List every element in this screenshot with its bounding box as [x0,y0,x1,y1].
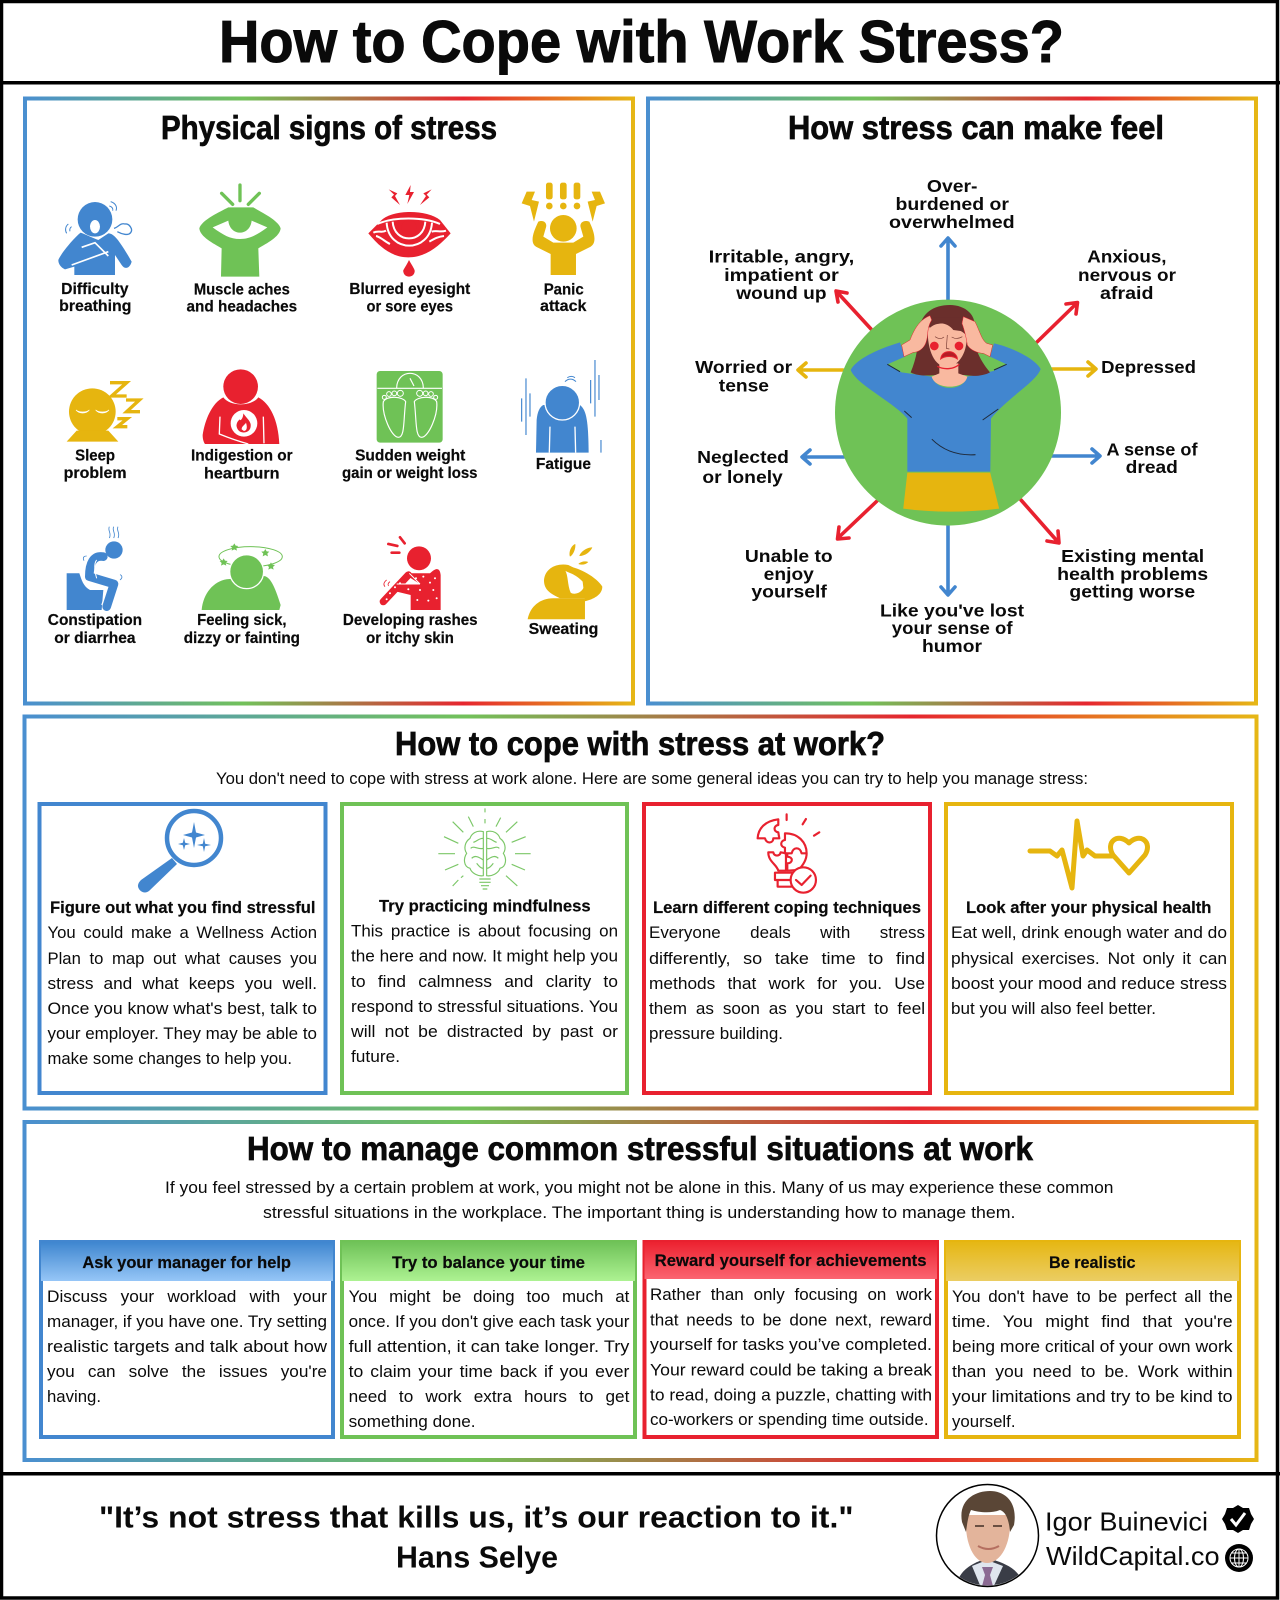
feeling labels: overwhelmed [889,212,1015,232]
icon: sweating [528,544,602,619]
heading and text: methods that work for you. Use [649,975,925,993]
body text: than you need to be. Work within [952,1363,1233,1381]
label: weight: Sudden weight [355,448,465,464]
icon: dizzy [202,543,282,610]
icon: brain light bulb [438,808,531,889]
panel: how to cope with stress at work [24,716,1256,1108]
icon: weight scale [377,371,443,443]
feeling labels: afraid [1100,283,1154,303]
heading and text: boost your mood and reduce stress [951,975,1227,993]
feeling labels: impatient or [724,265,839,285]
feeling labels: nervous or [1078,265,1176,285]
heading and text: make some changes to help you. [48,1050,292,1068]
heading: physical signs: Physical signs of stress [161,109,497,146]
heading and text: to find calmness and clarity to [351,973,618,991]
body text: co-workers or spending time outside. [650,1411,929,1429]
header label: Reward yourself for achievements [655,1252,926,1270]
feeling labels: Worried or [695,357,792,377]
feeling labels: dread [1126,457,1178,477]
card: be realistic [946,1242,1239,1437]
label: sweating: Sweating [529,621,598,638]
heading: how stress can make feel: How stress can make feel [788,109,1164,146]
feeling labels: your sense of [892,618,1013,638]
card: learn different coping techniques [644,804,930,1093]
label: indigestion [191,448,293,482]
label: muscle aches [186,282,297,316]
body text: Discuss your workload with your [47,1288,328,1306]
header label: Ask your manager for help [82,1254,291,1272]
feeling labels: Anxious, [1087,246,1166,266]
body text: to claim your time back if you ever [349,1363,630,1381]
card: try practicing mindfulness [342,804,627,1093]
label: difficulty breathing: Difficulty [61,281,129,298]
body text [952,1288,1233,1431]
card: reward yourself [644,1242,937,1437]
feeling labels: Depressed [1101,357,1196,377]
label: muscle aches: Muscle aches [194,282,290,298]
label: constipation [48,612,142,647]
label: sleep problem [64,448,127,482]
author portrait [936,1484,1038,1590]
intro text: You don't need to cope with stress at work alone. Here are some general ideas you can try to help you manage stress: [216,770,1088,788]
heading and text: respond to stressful situations. You [351,998,618,1016]
heading and text: your employer. They may be able to [48,1025,317,1043]
panel: how to manage common stressful situations [24,1122,1256,1460]
label: blurred eyesight: Blurred eyesight [349,281,470,298]
author name: Igor Buinevici [1045,1507,1208,1537]
heading and text: will not be distracted by past or [350,1023,619,1041]
footer quote: "It’s not stress that kills us, it’s our reaction to it." [99,1500,853,1535]
feeling labels: Neglected [697,447,789,467]
feeling labels [695,176,1208,656]
heading and text: Try practicing mindfulness [379,898,591,916]
feeling labels: Unable to [745,546,833,566]
label: rash [343,612,478,647]
body text: manager, if you have one. Try setting [47,1313,327,1331]
heading and text: the here and now. It might help you [351,948,618,966]
label: dizzy: dizzy or fainting [184,630,300,647]
header label: Be realistic [1049,1254,1136,1272]
body text: being more critical of your own work [952,1338,1233,1356]
feeling labels: health problems [1057,564,1208,584]
icon: blurred eyesight [368,185,451,277]
feeling labels: Irritable, angry, [709,246,854,266]
heading and text: Figure out what you find stressful [50,899,316,917]
icon: rash [383,537,441,610]
card header [41,1242,333,1281]
arrows radiating from the circle [798,238,1100,595]
heading and text: Everyone deals with stress [649,924,925,942]
body text: once. If you don't give each task your [349,1313,630,1331]
feeling labels: yourself [751,582,827,602]
feeling labels: burdened or [896,194,1009,214]
intro text: stressful situations in the workplace. The important thing is understanding how to manage them. [263,1204,1015,1222]
icon: globe [1225,1544,1253,1572]
heading and text: pressure building. [649,1025,783,1043]
author website: WildCapital.co [1046,1541,1220,1571]
panel: physical signs of stress [25,98,633,704]
intro text [165,1179,1114,1222]
heading and text: stress and what keeps you well. [48,975,317,993]
heading and text [350,898,619,1066]
icon: difficulty breathing [58,202,132,275]
body text: your limitations and try to be kind to [952,1388,1233,1406]
icon: heartbeat [1030,821,1147,888]
heading and text: Look after your physical health [966,899,1211,917]
body text [650,1286,933,1429]
heading and text: future. [351,1048,400,1066]
feeling labels: or lonely [702,467,783,487]
heading and text: physical exercises. Not only it can [951,950,1227,968]
card header [342,1242,635,1281]
heading and text: differently, so take time to find [649,950,925,968]
heading: manage situations: How to manage common stressful situations at work [247,1130,1034,1167]
heading and text [48,899,317,1068]
heading and text: You could make a Wellness Action [48,924,317,942]
feeling labels: humor [922,636,982,656]
body text: yourself for tasks you’ve completed. [650,1336,932,1354]
card: figure out what you find stressful [40,804,326,1093]
label: dizzy [184,612,300,647]
body text: full attention, it can take longer. Try [349,1338,630,1356]
header label: Try to balance your time [392,1254,585,1272]
label: rash: Developing rashes [343,612,478,629]
label: constipation: or diarrhea [54,630,136,647]
label: difficulty breathing [59,281,131,315]
feeling labels: wound up [735,283,826,303]
feeling labels: getting worse [1069,582,1195,602]
body text: that needs to be done next, reward [650,1312,932,1330]
icon: panic attack [522,183,605,275]
body text: realistic targets and talk about how [47,1338,327,1356]
label: muscle aches: and headaches [186,298,297,316]
intro text: If you feel stressed by a certain problem at work, you might not be alone in this. Many of us may experience these common [165,1179,1114,1197]
body text: yourself. [952,1413,1016,1431]
body text: time. You might find that you're [952,1313,1233,1331]
body text: you can solve the issues you're [47,1363,327,1381]
label: panic attack: attack [540,298,587,315]
label: panic attack [540,282,587,315]
panel: how stress can make feel [648,98,1256,704]
icon: constipation [67,527,123,610]
body text: You might be doing too much at [349,1288,630,1306]
icon: magnifier [138,811,221,892]
label: blurred eyesight: or sore eyes [366,298,453,316]
feeling labels: Existing mental [1061,546,1204,566]
card header [644,1242,937,1279]
card: look after your physical health [946,804,1232,1093]
icon: muscle aches [199,185,281,277]
label: rash: or itchy skin [366,630,454,647]
body text: Rather than only focusing on work [650,1286,933,1304]
feeling labels: enjoy [764,564,814,584]
body text: Your reward could be taking a break [650,1362,933,1380]
body text: having. [47,1388,101,1406]
body text: to read, doing a puzzle, chatting with [650,1387,932,1405]
label: blurred eyesight [349,281,470,316]
heading and text: Once you know what's best, talk to [48,1000,317,1018]
body text: something done. [349,1413,476,1431]
body text [349,1288,630,1431]
heading and text: This practice is about focusing on [351,923,618,941]
icon: puzzle light bulb [758,814,819,893]
circle with stressed woman [835,300,1061,526]
card: balance your time [342,1242,635,1437]
label: indigestion: heartburn [204,466,280,482]
body text: need to work extra hours to get [349,1388,630,1406]
heading and text: Learn different coping techniques [653,899,921,917]
heading and text: Eat well, drink enough water and do [951,924,1227,942]
feeling labels: A sense of [1106,440,1198,460]
footer quote [99,1500,853,1575]
body text [47,1288,328,1406]
footer quote: Hans Selye [396,1540,558,1575]
label: sleep problem: problem [64,465,127,482]
label: dizzy: Feeling sick, [197,612,286,629]
icon: sleep problem [67,383,140,442]
body text: You don't have to be perfect all the [952,1288,1233,1306]
heading and text [649,899,925,1043]
label: fatigue: Fatigue [536,456,591,473]
label: difficulty breathing: breathing [59,298,131,315]
title: How to Cope with Work Stress? [219,9,1064,75]
icon: verified badge [1222,1505,1254,1533]
feeling labels: tense [719,375,769,395]
woman illustration [851,305,1041,512]
label: weight: gain or weight loss [342,465,478,482]
heading and text [951,899,1227,1018]
label: weight [342,448,478,482]
label: panic attack: Panic [544,282,584,298]
feeling labels: Over- [927,176,978,196]
icon: fatigue [522,360,601,453]
heading: cope at work: How to cope with stress at work? [395,725,885,762]
heading and text: them as soon as you start to feel [649,1000,925,1018]
label: constipation: Constipation [48,612,142,629]
heading and text: Plan to map out what causes you [48,950,317,968]
card: ask your manager [41,1242,333,1437]
card header [946,1242,1239,1281]
icon: indigestion [203,369,279,444]
feeling labels: Like you've lost [880,601,1024,621]
label: indigestion: Indigestion or [191,448,293,464]
label: sleep problem: Sleep [75,448,115,464]
heading and text: but you will also feel better. [951,1000,1156,1018]
